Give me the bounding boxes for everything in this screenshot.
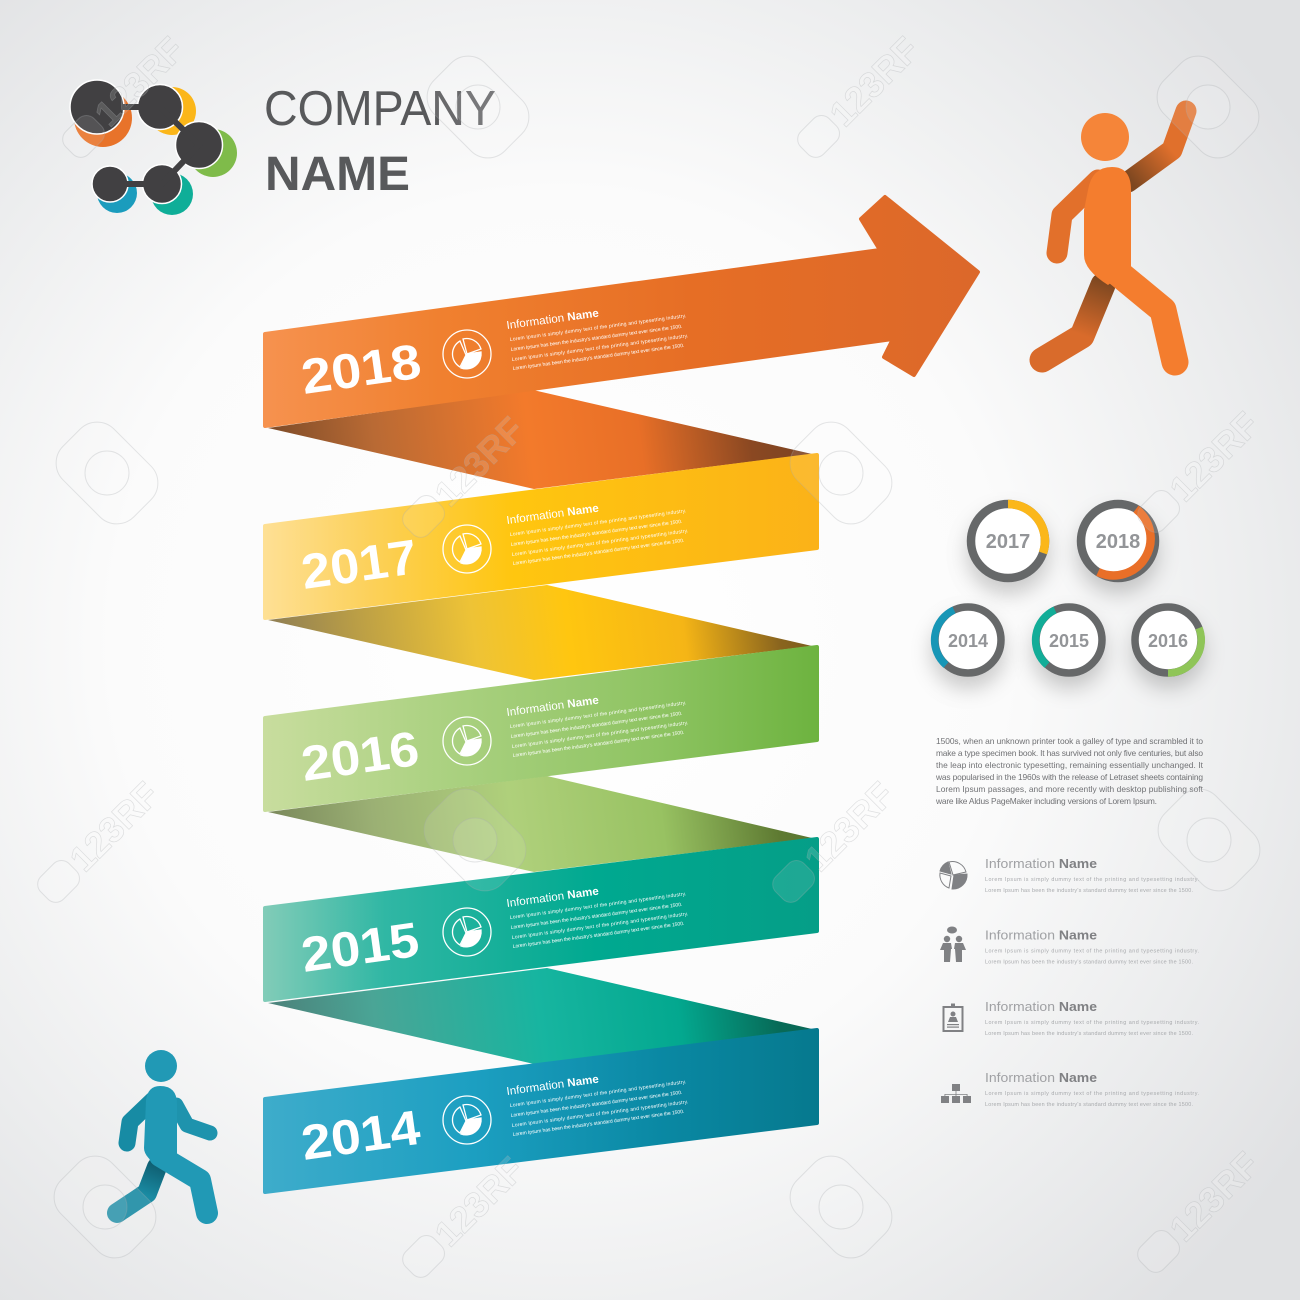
title: company name: NAME <box>265 148 410 201</box>
donut: 2016 <box>1135 607 1201 673</box>
information text: Lorem Ipsum is simply dummy text of the printing and typesetting industry. <box>511 911 689 941</box>
donut: 2015: 2015 <box>1049 631 1089 651</box>
title: company name <box>264 82 496 201</box>
text: 123RF <box>1161 404 1267 509</box>
paragraph text <box>935 736 1204 806</box>
info row: id badge: Information Name <box>985 999 1097 1014</box>
paragraph text: Lorem Ipsum passages, and more recently with desktop publishing soft <box>936 784 1204 794</box>
icon: pie chart <box>940 862 967 889</box>
info row: pie chart: Lorem Ipsum has been the industry's standard dummy text ever since the 1500. <box>985 888 1193 894</box>
info row: org chart: Information Name <box>985 1070 1097 1085</box>
information text: Lorem Ipsum is simply dummy text of the printing and typesetting industry. <box>509 700 687 730</box>
ribbon band: 2016 <box>265 647 817 810</box>
logo <box>70 80 237 215</box>
information text: Lorem Ipsum has been the industry's standard dummy text ever since the 1500. <box>512 921 685 950</box>
paragraph text: ware like Aldus PageMaker including versions of Lorem Ipsum. <box>935 796 1157 806</box>
donut: 2014 <box>935 607 1001 673</box>
donut: 2017: 2017 <box>986 531 1030 553</box>
donut: 2014: 2014 <box>948 631 988 651</box>
info row: org chart: Lorem Ipsum is simply dummy text of the printing and typesetting industry. <box>985 1091 1199 1097</box>
info row: pie chart: Information Name <box>985 856 1097 871</box>
text: 123RF <box>796 774 902 879</box>
ribbon band: 2015 <box>265 839 817 1000</box>
icon: blue walking person <box>117 1050 210 1213</box>
text: 123RF <box>1161 1144 1267 1249</box>
icon: pie chart <box>443 717 491 765</box>
information text: Lorem Ipsum is simply dummy text of the printing and typesetting industry. <box>509 508 687 538</box>
donut: 2016: 2016 <box>1148 631 1188 651</box>
info row: id badge: Lorem Ipsum has been the industry's standard dummy text ever since the 1500. <box>985 1031 1193 1037</box>
icon: pie chart <box>443 330 491 378</box>
text: 123RF <box>821 29 927 134</box>
information text <box>506 308 689 372</box>
info row: people <box>940 926 1199 966</box>
information text: Lorem Ipsum has been the industry's standard dummy text ever since the 1500. <box>512 730 685 759</box>
text: 123RF <box>426 1149 532 1254</box>
ribbon band: 2017 <box>265 455 817 618</box>
year label 2015: 2015 <box>298 913 422 983</box>
info row: people: Information Name <box>985 928 1097 942</box>
ribbon arrow: 2018 <box>265 197 978 426</box>
information text: Lorem Ipsum has been the industry's standard dummy text ever since the 1500. <box>512 1109 685 1138</box>
icon: pie chart <box>443 1096 491 1144</box>
information text: Lorem Ipsum is simply dummy text of the printing and typesetting industry. <box>511 1099 689 1129</box>
information text: Information Name <box>506 1074 600 1098</box>
icon: org chart <box>941 1084 971 1103</box>
fold: 2016 to 2015 <box>268 776 812 872</box>
text: 123RF <box>61 774 167 879</box>
information text <box>506 503 689 567</box>
info row: id badge: Lorem Ipsum is simply dummy text of the printing and typesetting industry. <box>985 1020 1199 1026</box>
icon: pie chart <box>443 525 491 573</box>
year label 2014: 2014 <box>298 1101 423 1171</box>
information text: Lorem Ipsum has been the industry's standard dummy text ever since the 1500. <box>510 519 683 548</box>
paragraph text: make a type specimen book. It has survived not only five centuries, but also <box>936 748 1203 758</box>
information text: Information Name <box>506 695 600 719</box>
info row: org chart <box>941 1070 1199 1108</box>
information text: Lorem Ipsum has been the industry's standard dummy text ever since the 1500. <box>510 1090 683 1119</box>
info row: pie chart: Lorem Ipsum is simply dummy text of the printing and typesetting industry. <box>985 877 1199 883</box>
fold: 2018 to 2017 <box>268 390 812 489</box>
information text: Information Name <box>506 503 600 527</box>
information text <box>506 886 689 950</box>
information text <box>506 695 689 759</box>
information text: Lorem Ipsum is simply dummy text of the printing and typesetting industry. <box>511 333 689 363</box>
information text: Information Name <box>506 308 600 332</box>
icon: orange running person <box>1042 111 1186 362</box>
ribbon band: 2014 <box>265 1030 817 1192</box>
information text: Information Name <box>506 886 600 910</box>
icon: two people talking <box>940 926 966 962</box>
paragraph text: 1500s, when an unknown printer took a galley of type and scrambled it to <box>936 736 1203 746</box>
information text: Lorem Ipsum is simply dummy text of the printing and typesetting industry. <box>511 720 689 750</box>
info row: people: Lorem Ipsum has been the industry's standard dummy text ever since the 1500. <box>985 960 1193 966</box>
info row: id badge <box>944 999 1199 1037</box>
icon: id badge <box>944 1004 962 1031</box>
paragraph text: was popularised in the 1960s with the release of Letraset sheets containing <box>935 772 1203 782</box>
information text: Lorem Ipsum has been the industry's standard dummy text ever since the 1500. <box>510 902 683 931</box>
donut: 2017 <box>971 504 1045 578</box>
information text: Lorem Ipsum is simply dummy text of the printing and typesetting industry. <box>509 1079 687 1109</box>
information text: Lorem Ipsum is simply dummy text of the printing and typesetting industry. <box>509 891 687 921</box>
information text: Lorem Ipsum has been the industry's standard dummy text ever since the 1500. <box>510 711 683 740</box>
year label 2016: 2016 <box>298 722 422 792</box>
fold: 2015 to 2014 <box>268 968 812 1064</box>
information text: Lorem Ipsum has been the industry's standard dummy text ever since the 1500. <box>512 343 685 372</box>
title: company name: COMPANY <box>264 82 496 136</box>
donut: 2015 <box>1036 607 1102 673</box>
donut: 2018: 2018 <box>1096 531 1140 553</box>
information text: Lorem Ipsum has been the industry's standard dummy text ever since the 1500. <box>512 538 685 567</box>
donut: 2018 <box>1081 504 1155 578</box>
year label 2018: 2018 <box>298 335 424 405</box>
info row: org chart: Lorem Ipsum has been the industry's standard dummy text ever since the 1500. <box>985 1102 1193 1108</box>
fold: 2017 to 2016 <box>268 585 812 680</box>
text: 123RF <box>426 409 532 514</box>
information text: Lorem Ipsum is simply dummy text of the printing and typesetting industry. <box>509 313 687 343</box>
information text <box>506 1074 689 1138</box>
information text: Lorem Ipsum has been the industry's standard dummy text ever since the 1500. <box>510 324 683 353</box>
info row: pie chart <box>940 856 1199 894</box>
paragraph text: the leap into electronic typesetting, remaining essentially unchanged. It <box>936 760 1204 770</box>
icon: pie chart <box>443 908 491 956</box>
text: 123RF <box>86 29 192 134</box>
info row: people: Lorem Ipsum is simply dummy text of the printing and typesetting industry. <box>985 948 1199 954</box>
information text: Lorem Ipsum is simply dummy text of the printing and typesetting industry. <box>511 528 689 558</box>
year label 2017: 2017 <box>298 530 420 600</box>
